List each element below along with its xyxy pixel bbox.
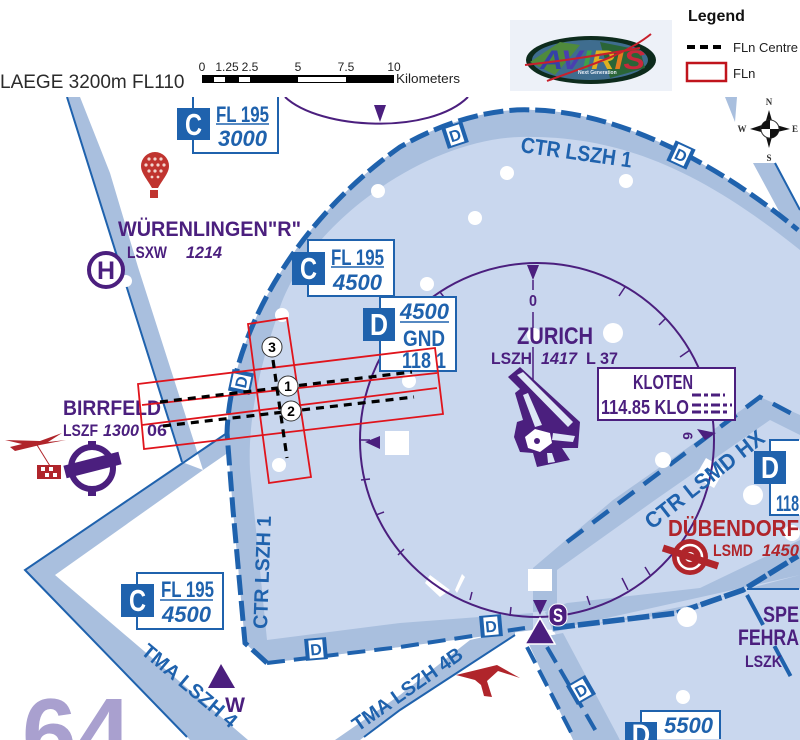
box: C FL195 4500 lower: C xyxy=(129,583,146,618)
band: CTR LSMD boundary xyxy=(533,397,800,612)
legend item: footprint: FLn xyxy=(733,66,755,81)
label: BIRRFELD: LSZF xyxy=(63,421,98,440)
footprint: FL1 centre edge xyxy=(142,373,437,405)
label: WURENLINGEN: WÜRENLINGEN"R" xyxy=(118,218,301,241)
ring markers: 0 xyxy=(529,293,537,310)
label: ZURICH: ZURICH xyxy=(517,323,593,350)
band: TMA south-west lower xyxy=(25,462,248,740)
dashed: right stepped xyxy=(553,556,798,628)
north arrow compass: E xyxy=(792,124,798,134)
scale bar xyxy=(199,60,461,86)
north arrow compass xyxy=(738,97,798,163)
label: DUBENDORF: LSMD xyxy=(713,541,753,560)
icon: red balloon xyxy=(141,152,169,198)
D class tags: D xyxy=(485,619,498,636)
line: TMA west xyxy=(67,97,182,462)
dashed: Speck zone edge xyxy=(747,595,798,690)
label: ZURICH: LSZH xyxy=(491,349,532,368)
label: WURENLINGEN xyxy=(118,218,301,262)
box: D right edge: D xyxy=(761,450,779,485)
box: KLOTEN VOR: 114.85 KLO xyxy=(601,397,689,419)
footprint: FL3 xyxy=(248,318,311,483)
box: C FL195 3000: C xyxy=(185,107,202,142)
icon: Zurich airport xyxy=(508,367,580,467)
box: C FL195 4500 lower xyxy=(121,573,223,629)
box: C FL195 3000: FL 195 xyxy=(216,102,269,127)
D class tags: D xyxy=(447,127,464,146)
scale bar: 2.5 xyxy=(242,60,259,74)
box: KLOTEN VOR xyxy=(598,368,735,420)
box: C FL195 3000 xyxy=(177,90,278,153)
white header strip xyxy=(0,0,800,97)
icon: hang glider xyxy=(456,665,520,697)
flight line footprints xyxy=(138,318,443,483)
label: ZURICH: L 37 xyxy=(586,349,618,368)
label: WURENLINGEN: 1214 xyxy=(186,243,223,262)
label: TMA LSZH 4B: TMA LSZH 4B xyxy=(348,644,467,736)
scale bar: 5 xyxy=(295,60,302,74)
icon: reporting point S xyxy=(525,604,567,644)
legend: Legend xyxy=(688,8,745,25)
label: BIRRFELD: 1300 xyxy=(103,421,140,440)
scale bar: Kilometers xyxy=(396,71,461,86)
D tile of 5500 box xyxy=(625,722,657,740)
label: ZURICH xyxy=(491,323,618,368)
label: TMA LSZH 4: TMA LSZH 4 xyxy=(137,640,242,733)
scale bar: 10 xyxy=(387,60,401,74)
box: C FL195 4500: C xyxy=(300,251,317,286)
D class tags: D xyxy=(310,642,323,659)
icon: heliport H xyxy=(89,253,123,287)
centre: FL2 xyxy=(163,397,414,426)
box: C FL195 4500 lower: 4500 xyxy=(161,602,212,627)
line: top right xyxy=(775,163,800,210)
ring markers xyxy=(365,105,716,615)
label: SPECK FEHRALTORF xyxy=(738,602,799,671)
line: TMA 4B edge xyxy=(364,635,515,737)
line: TMA south-west xyxy=(25,433,227,737)
dashed: south corridor A xyxy=(527,647,573,736)
scale bar: 1.25 xyxy=(215,60,239,74)
box: D 4500 GND 118.1: 118 1 xyxy=(402,348,446,373)
white reporting dots xyxy=(120,166,800,704)
box: D 4500 GND 118.1: 4500 xyxy=(399,299,450,324)
band: lower right corridor xyxy=(527,633,620,740)
flight line number markers xyxy=(262,337,301,421)
band: TMA west boundary xyxy=(67,97,232,470)
band: right segment from S xyxy=(545,540,800,632)
box: C FL195 3000: 3000 xyxy=(218,126,268,151)
AVIRIS logo: AVIRIS xyxy=(539,45,645,75)
north arrow compass: W xyxy=(738,124,746,134)
label: DUBENDORF xyxy=(668,515,800,560)
label: CTR LSZH 1 left: CTR LSZH 1 xyxy=(250,515,276,629)
label: SPECK FEHRALTORF: LSZK xyxy=(745,652,783,671)
label: ZURICH: 1417 xyxy=(541,349,578,368)
dashed: CTR LSZH arc xyxy=(227,110,798,663)
title: flight info: LAEGE 3200m FL110 xyxy=(0,72,184,93)
band: TMA LSZH 4B xyxy=(335,630,515,740)
box: C FL195 4500: FL 195 xyxy=(331,245,384,270)
icon: glider and checker xyxy=(5,433,66,479)
arc: northern VOR ring fragment xyxy=(285,97,468,124)
scale bar: 7.5 xyxy=(338,60,355,74)
label: BIRRFELD xyxy=(63,397,167,440)
centre: FL3 xyxy=(273,360,287,458)
ring markers: 6 xyxy=(680,432,696,440)
dashed: south corridor B xyxy=(547,647,597,733)
footprint: FL2 centre edge xyxy=(142,388,437,425)
label: WURENLINGEN: LSXW xyxy=(127,243,168,262)
airspace labels xyxy=(137,132,770,736)
box: D right edge xyxy=(754,440,800,516)
band: CTR LSZH boundary xyxy=(227,110,800,663)
icon: reporting point W xyxy=(208,664,245,717)
box: C FL195 4500 lower: FL 195 xyxy=(161,577,214,602)
icon: heliport H: H xyxy=(97,257,115,285)
box: C FL195 4500: 4500 xyxy=(332,270,383,295)
band: top right fragments xyxy=(725,97,800,250)
label: CTR LSZH 1 top: CTR LSZH 1 xyxy=(519,132,634,173)
icon: reporting point S: S xyxy=(553,606,563,627)
D class tags: D xyxy=(672,146,689,167)
dashed: CTR LSMD xyxy=(567,397,798,542)
Zurich VOR compass ring xyxy=(285,97,714,617)
AVIRIS logo: Next Generation xyxy=(578,70,617,76)
dashed: CTR LSZH bottom xyxy=(267,628,525,663)
label: BIRRFELD: 06 xyxy=(147,421,167,440)
line: right thin xyxy=(747,588,799,590)
legend xyxy=(687,8,798,81)
label: BIRRFELD: BIRRFELD xyxy=(63,397,161,420)
north arrow compass: S xyxy=(766,153,772,163)
flight line number markers: 2 xyxy=(287,403,295,419)
centre: FL1 xyxy=(160,372,412,402)
legend item: centre line: FLn Centre xyxy=(733,40,798,55)
footprint: FL1 and FL2 xyxy=(138,348,443,449)
north arrow compass: N xyxy=(766,97,773,107)
scale bar: 0 xyxy=(199,60,206,74)
icon: Birrfeld aerodrome xyxy=(65,441,120,496)
box: D 4500 GND 118.1: D xyxy=(370,307,388,342)
zone: CTR LSZH light fill xyxy=(227,110,800,740)
label: CTR LSMD HX: CTR LSMD HX xyxy=(640,425,770,534)
box: 5500 xyxy=(641,711,720,739)
AVIRIS logo xyxy=(510,20,672,91)
D class tags xyxy=(228,121,696,705)
zone: white wedge south of S xyxy=(360,635,573,740)
flight line number markers: 3 xyxy=(268,339,276,355)
flight line number markers: 1 xyxy=(284,378,292,394)
box: C FL195 4500 xyxy=(292,240,394,296)
icon: reporting point W: W xyxy=(225,694,245,717)
box: 5500: 5500 xyxy=(664,713,714,738)
icon: Dubendorf aerodrome xyxy=(663,539,718,575)
box: D 4500 GND 118.1: GND xyxy=(403,326,445,351)
flight line centres xyxy=(160,360,414,458)
box: KLOTEN VOR: KLOTEN xyxy=(633,372,693,394)
D class tags: D xyxy=(233,375,252,390)
D class tags: D xyxy=(572,681,591,702)
label: DUBENDORF: 1450 xyxy=(762,541,800,560)
box: D 4500 GND 118.1 xyxy=(363,297,456,373)
